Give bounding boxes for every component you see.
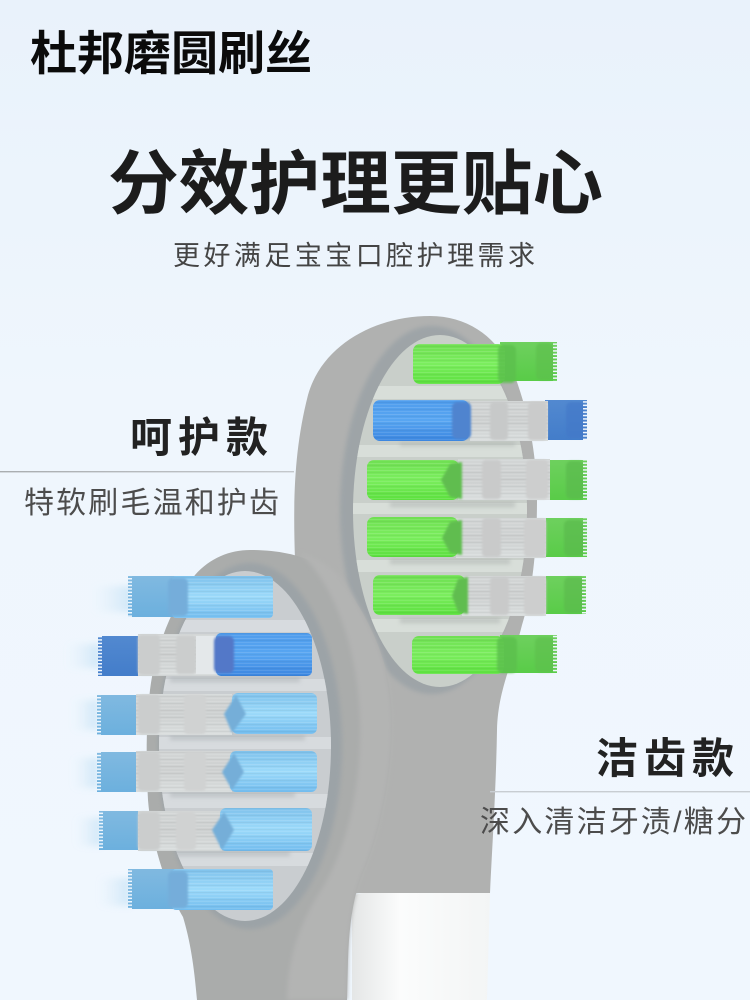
tuft row 6: [128, 869, 273, 910]
plate: shadows under tufts: [390, 442, 515, 623]
head: bristle plate: [159, 571, 331, 921]
head: lighter outer rim: [287, 553, 392, 1000]
tuft row 5: [373, 575, 586, 616]
heading: 杜邦磨圆刷丝: 杜邦磨圆刷丝: [30, 27, 312, 80]
tuft row 6: [412, 635, 557, 674]
plate: shadows under tufts: [170, 677, 305, 856]
subtitle: 更好满足宝宝口腔护理需求: [173, 241, 535, 271]
label: 呵护款: [0, 414, 294, 520]
tuft row 3: [367, 459, 587, 500]
head: dark inner band: [158, 563, 342, 929]
tuft row 4: [367, 517, 587, 558]
tuft row 1: [128, 576, 273, 618]
brush: blue care head: [66, 550, 392, 1000]
head: bristle plate: [353, 335, 527, 687]
title: 分效护理更贴心: 分效护理更贴心: [108, 145, 603, 223]
label: 洁齿款: [480, 735, 750, 839]
tuft row 3: [97, 693, 317, 735]
stray bristle blur: [66, 586, 132, 906]
label: 呵护款: 特软刷毛温和护齿: [24, 487, 279, 520]
plate: stripes between tufts: [350, 386, 530, 632]
tuft row 1: [413, 342, 557, 384]
tuft row 2: [373, 400, 587, 441]
head: grey shell: [294, 316, 537, 893]
label: 洁齿款: 深入清洁牙渍/糖分: [480, 806, 746, 839]
tuft row 2: [98, 633, 312, 676]
brush: green cleaning head: [294, 316, 587, 1000]
head: dark inner band: [340, 326, 524, 694]
plate: stripes between tufts: [155, 620, 335, 866]
label: 洁齿款: 洁齿款: [596, 735, 734, 782]
tuft row 5: [99, 808, 312, 851]
handle: white section: [352, 893, 490, 1000]
head: grey shell with neck: [147, 550, 392, 1000]
tuft row 4: [97, 751, 317, 792]
label: 呵护款: 呵护款: [130, 414, 268, 461]
